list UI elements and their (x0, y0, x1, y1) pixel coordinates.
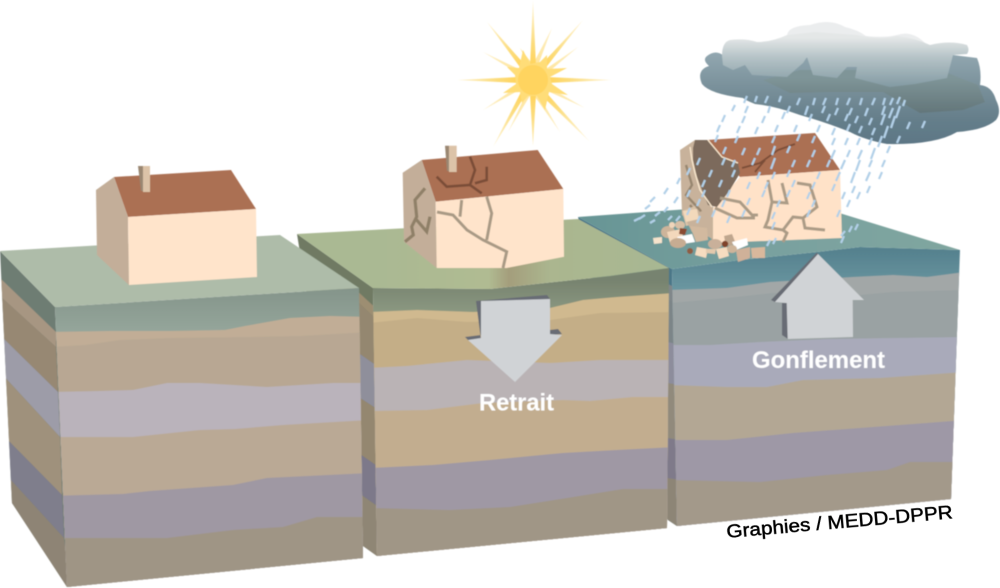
block 3 front strata (670, 245, 965, 530)
block 3: swelling ground (570, 201, 965, 530)
roof cracks (742, 144, 795, 172)
block 2 side face (296, 234, 378, 556)
house 2 side wall (403, 160, 437, 268)
block 1 front strata (50, 285, 370, 588)
house: cracked (403, 146, 564, 268)
arrow shadow (465, 295, 550, 340)
wall cracks (437, 197, 507, 268)
house 1 front wall (128, 209, 257, 285)
house 2 chimney (445, 146, 457, 172)
block 3 top surface (578, 201, 960, 269)
block 1: stable ground (0, 235, 370, 588)
block 2: shrinking ground (290, 219, 675, 565)
credit line: Graphies / MEDD-DPPR (726, 502, 953, 542)
roof cracks (437, 157, 487, 193)
arrow shadow (771, 253, 819, 302)
storm cloud (700, 22, 999, 144)
label: Retrait: Retrait (479, 390, 554, 416)
block 1 top surface (0, 235, 359, 307)
arrow body (468, 299, 562, 382)
house 1 side wall (96, 177, 129, 285)
down arrow (465, 295, 562, 382)
rubble (653, 206, 765, 262)
house 3 roof (707, 133, 840, 177)
house 2 roof (422, 150, 563, 202)
cloud pale top (787, 22, 925, 46)
house 3 side wall (680, 140, 713, 240)
label: Gonflement: Gonflement (752, 347, 885, 374)
side wall cracks (405, 188, 430, 242)
rain (634, 96, 925, 246)
house 1 chimney (138, 166, 150, 192)
long rays (457, 0, 612, 147)
arrow body (775, 254, 864, 339)
cloud dark back layer (700, 52, 999, 144)
house: intact (96, 166, 257, 285)
exposed edge lines (690, 140, 738, 207)
house 3 collapsed hole (693, 140, 740, 207)
up arrow (771, 253, 864, 339)
house: collapsing (653, 133, 842, 262)
house 1 roof (114, 170, 256, 217)
block 3 side face (578, 216, 678, 526)
cloud light front layer (722, 32, 968, 87)
sun core (503, 50, 568, 110)
house 3 front wall (713, 170, 842, 243)
cloud shadow band (763, 70, 985, 113)
sun (457, 0, 612, 147)
wall cracks (715, 180, 825, 242)
block 2 front strata (370, 265, 675, 560)
block 1 side face (0, 245, 70, 588)
side cracks (686, 165, 708, 225)
house 2 front wall (436, 189, 564, 268)
block 2 top surface (297, 219, 669, 289)
